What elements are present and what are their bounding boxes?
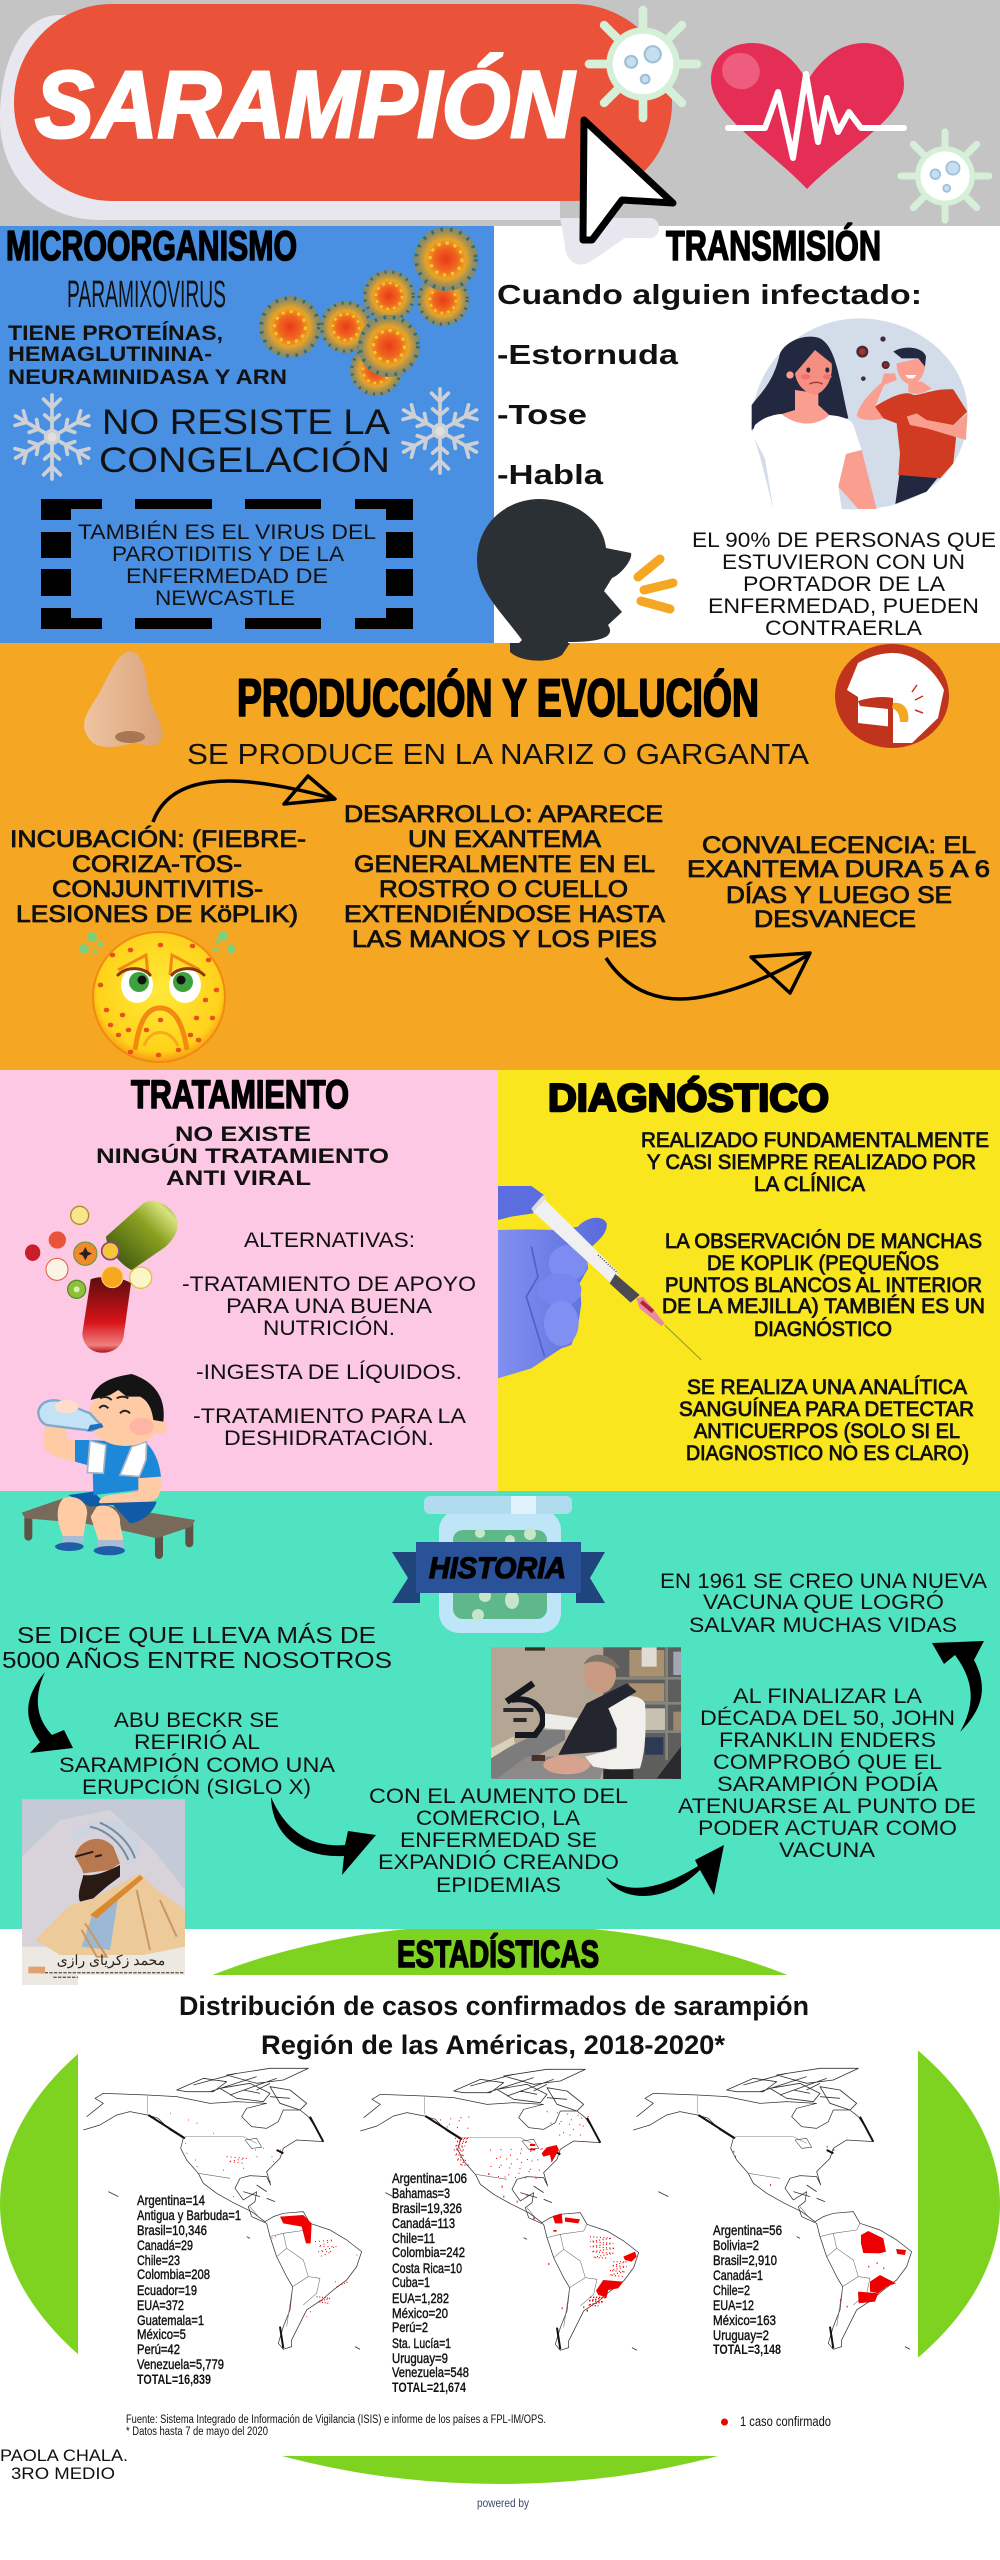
legend: 2018: México=5	[137, 2326, 186, 2342]
author credit	[0, 2446, 128, 2483]
legend: 2018: Colombia=208	[137, 2266, 210, 2282]
text: koplik	[662, 1230, 985, 1341]
banner	[392, 1542, 605, 1603]
text: proteinas: HEMAGLUTININA-	[8, 343, 212, 366]
legend: 2020: Bolivia=2	[713, 2237, 759, 2253]
text: alternativas: -TRATAMIENTO DE APOYO	[182, 1273, 476, 1296]
legend: 2018: TOTAL=16,839	[137, 2371, 211, 2387]
text: koplik: LA OBSERVACIÓN DE MANCHAS	[665, 1230, 982, 1253]
legend: 2019: México=20	[392, 2305, 448, 2321]
panel: estadisticas	[0, 1900, 1000, 2484]
text: abu beckr: ERUPCIÓN (SIGLO X)	[82, 1776, 311, 1799]
arrow: 5000 to abu	[28, 1672, 73, 1753]
legend: 2018: Venezuela=5,779	[137, 2356, 224, 2372]
panel: produccion y evolucion	[0, 643, 1000, 1070]
text: enders: FRANKLIN ENDERS	[719, 1729, 936, 1752]
text: 90 percent: PORTADOR DE LA	[743, 573, 945, 596]
dashed frame	[41, 499, 413, 629]
legend: 2018: EUA=372	[137, 2297, 184, 2313]
text: analitica	[679, 1376, 974, 1465]
text: alternativas: ALTERNATIVAS:	[244, 1229, 415, 1252]
legend: 2019: Canadá=113	[392, 2215, 455, 2231]
icon: virus small	[901, 132, 989, 220]
heading: TRANSMISIÓN	[666, 221, 881, 269]
legend: 2020: Canadá=1	[713, 2267, 763, 2283]
text: proteinas: TIENE PROTEÍNAS,	[8, 322, 223, 345]
text: 1961	[660, 1570, 987, 1637]
text: 90 percent: ENFERMEDAD, PUEDEN	[708, 595, 979, 618]
text: newcastle: ENFERMEDAD DE	[126, 565, 328, 588]
text: koplik: PUNTOS BLANCOS AL INTERIOR	[665, 1274, 982, 1297]
legend: 2020: México=163	[713, 2312, 776, 2328]
text: enders: VACUNA	[779, 1839, 875, 1862]
chart title: Distribución de casos confirmados de sarampión	[179, 1991, 809, 2021]
text: comercio	[369, 1785, 628, 1897]
text: clinica: REALIZADO FUNDAMENTALMENTE	[641, 1129, 989, 1152]
text: convalecencia: DESVANECE	[754, 906, 916, 933]
icon: nose	[84, 652, 162, 747]
text: convalecencia: CONVALECENCIA: EL	[702, 832, 976, 859]
text: incubacion: CORIZA-TOS-	[72, 851, 242, 878]
icon: nostril	[115, 731, 145, 743]
map: 2020	[633, 2068, 912, 2349]
text: 5000 anos: SE DICE QUE LLEVA MÁS DE	[17, 1622, 376, 1648]
text: enders: COMPROBÓ QUE EL	[713, 1751, 942, 1774]
text: incubacion: LESIONES DE KöPLIK)	[16, 901, 298, 928]
icon: snowflake right	[399, 389, 481, 473]
legend: 2018: Brasil=10,346	[137, 2222, 207, 2238]
legend: 2019: EUA=1,282	[392, 2290, 449, 2306]
legend: 2020: Brasil=2,910	[713, 2252, 777, 2268]
panel: microorganismo	[0, 222, 494, 644]
text: no existe: NO EXISTE	[175, 1123, 311, 1146]
source note: Fuente: Sistema Integrado de Información de Vigilancia (ISIS) e informe de los países a FPL-IM/OPS.	[126, 2414, 546, 2426]
icon: virus large	[589, 10, 697, 118]
chart title	[179, 1991, 809, 2060]
photo: scientist at microscope	[491, 1647, 681, 1779]
text: newcastle: TAMBIÉN ES EL VIRUS DEL	[78, 521, 376, 544]
text: abu beckr: SARAMPIÓN COMO UNA	[59, 1754, 335, 1777]
heading: ESTADÍSTICAS	[397, 1932, 599, 1976]
legend: 2020: TOTAL=3,148	[713, 2341, 781, 2357]
text: clinica: LA CLÍNICA	[754, 1173, 865, 1196]
legend: 2018: Canadá=29	[137, 2237, 193, 2253]
text: comercio: COMERCIO, LA	[416, 1807, 580, 1830]
heading: MICROORGANISMO	[6, 222, 297, 269]
text: 90 percent: CONTRAERLA	[765, 617, 922, 640]
arrow: comercio to enders	[606, 1845, 724, 1896]
legend: 2019: Argentina=106	[392, 2170, 467, 2186]
text: enders: AL FINALIZAR LA	[733, 1685, 922, 1708]
panel: header	[0, 0, 1000, 265]
text: congelacion: CONGELACIÓN	[99, 441, 390, 480]
illustration: people coughing	[752, 318, 968, 509]
text: koplik: DE LA MEJILLA) TAMBIÉN ES UN	[662, 1295, 985, 1318]
text: desarrollo: EXTENDIÉNDOSE HASTA	[344, 901, 665, 928]
text: enders: SARAMPIÓN PODÍA	[717, 1773, 938, 1796]
text: alternativas: -TRATAMIENTO PARA LA	[193, 1405, 466, 1428]
photo: abu beckr portrait	[22, 1799, 185, 1985]
legend: 2020: Chile=2	[713, 2282, 750, 2298]
legend: 2019: Bahamas=3	[392, 2185, 450, 2201]
arrow: desarrollo to convalecencia	[606, 953, 810, 999]
panel: tratamiento	[0, 1070, 498, 1491]
icon: heart with pulse	[711, 43, 904, 189]
text: analitica: SE REALIZA UNA ANALÍTICA	[687, 1376, 967, 1399]
text: 90 percent	[692, 529, 996, 640]
text: analitica: ANTICUERPOS (SOLO SI EL	[694, 1420, 960, 1443]
text: alternativas: DESHIDRATACIÓN.	[224, 1427, 434, 1450]
legend: 2019	[392, 2170, 469, 2395]
legend: 2019: Uruguay=9	[392, 2350, 448, 2366]
powered by: powered by	[477, 2496, 529, 2510]
text: analitica: SANGUÍNEA PARA DETECTAR	[679, 1398, 974, 1421]
legend: 2018: Antigua y Barbuda=1	[137, 2207, 241, 2223]
text: convalecencia: EXANTEMA DURA 5 A 6	[687, 856, 990, 883]
green ellipse	[0, 1924, 1000, 2484]
text: comercio: CON EL AUMENTO DEL	[369, 1785, 628, 1808]
legend: 2019: Venezuela=548	[392, 2364, 469, 2380]
text: list: -Habla	[497, 459, 604, 490]
legend: 2018: Perú=42	[137, 2341, 180, 2357]
white map area	[78, 1975, 918, 2456]
text: desarrollo: DESARROLLO: APARECE	[344, 801, 663, 828]
subheading: SE PRODUCE EN LA NARIZ O GARGANTA	[187, 739, 810, 771]
text: no existe: NINGÚN TRATAMIENTO	[96, 1144, 389, 1168]
text: desarrollo: ROSTRO O CUELLO	[379, 876, 628, 903]
legend: 2019: Perú=2	[392, 2319, 428, 2335]
pill shadow	[0, 15, 659, 265]
text: enders: PODER ACTUAR COMO	[698, 1817, 957, 1840]
text: enders: DÉCADA DEL 50, JOHN	[700, 1707, 955, 1730]
author credit: PAOLA CHALA.	[0, 2446, 128, 2465]
virus cluster	[259, 227, 478, 396]
text: koplik: DIAGNÓSTICO	[754, 1318, 892, 1341]
text: koplik: DE KOPLIK (PEQUEÑOS	[707, 1251, 939, 1275]
text: comercio: EXPANDIÓ CREANDO	[378, 1851, 619, 1874]
text: proteinas: NEURAMINIDASA Y ARN	[8, 366, 287, 389]
text: desarrollo: UN EXANTEMA	[408, 826, 601, 853]
text: incubacion	[10, 826, 306, 928]
heading: PRODUCCIÓN Y EVOLUCIÓN	[237, 668, 759, 728]
author credit: 3RO MEDIO	[11, 2464, 115, 2483]
text: alternativas	[182, 1229, 476, 1450]
text: desarrollo: LAS MANOS Y LOS PIES	[352, 926, 657, 953]
heading: TRATAMIENTO	[131, 1073, 349, 1117]
text: enders	[678, 1685, 976, 1862]
legend: 2018: Guatemala=1	[137, 2312, 204, 2328]
chart title: Región de las Américas, 2018-2020*	[261, 2030, 725, 2060]
text: 1961: EN 1961 SE CREO UNA NUEVA	[660, 1570, 987, 1593]
title pill	[14, 4, 672, 201]
text: abu beckr: REFIRIÓ AL	[134, 1731, 260, 1754]
text: 1961: VACUNA QUE LOGRÓ	[703, 1591, 944, 1614]
subheading: PARAMIXOVIRUS	[67, 274, 226, 316]
icon: snowflake left	[11, 395, 93, 479]
legend: 2019: Brasil=19,326	[392, 2200, 462, 2216]
text: abu beckr	[59, 1709, 335, 1799]
icon: throat	[835, 644, 949, 748]
text: 5000 anos	[2, 1622, 392, 1673]
panel: transmision	[477, 221, 996, 660]
map key: 1 caso confirmado	[740, 2414, 831, 2429]
legend: 2020: Uruguay=2	[713, 2327, 769, 2343]
legend: 2019: Colombia=242	[392, 2244, 465, 2260]
text: comercio: EPIDEMIAS	[436, 1874, 561, 1897]
text: alternativas: PARA UNA BUENA	[226, 1295, 432, 1318]
head bottom overlap	[510, 643, 570, 661]
text: 5000 anos: 5000 AÑOS ENTRE NOSOTROS	[2, 1647, 392, 1673]
legend: 2019: TOTAL=21,674	[392, 2379, 466, 2395]
arrow: enders to 1961	[932, 1641, 984, 1732]
text: list: -Tose	[497, 399, 587, 430]
title: SARAMPIÓN	[35, 52, 576, 158]
text: convalecencia: DÍAS Y LUEGO SE	[726, 882, 952, 909]
banner: HISTORIA	[429, 1552, 566, 1585]
heading: DIAGNÓSTICO	[548, 1076, 829, 1120]
text: desarrollo	[344, 801, 665, 953]
text: list: -Estornuda	[497, 339, 679, 370]
legend: 2019: Sta. Lucía=1	[392, 2335, 451, 2351]
legend: 2018: Chile=23	[137, 2252, 180, 2268]
text: abu beckr: ABU BECKR SE	[114, 1709, 279, 1732]
legend: 2018	[137, 2192, 241, 2387]
icon: boy drinking water	[22, 1374, 195, 1555]
text: congelacion: NO RESISTE LA	[102, 403, 391, 442]
text: convalecencia	[687, 832, 990, 933]
portrait caption: محمد زکریای رازی	[57, 1952, 165, 1969]
icon: speaking head	[477, 499, 673, 660]
text: 1961: SALVAR MUCHAS VIDAS	[689, 1614, 957, 1637]
source note	[126, 2414, 546, 2438]
legend: 2020	[713, 2222, 782, 2357]
panel: historia	[0, 1491, 1000, 1929]
icon: flask	[424, 1496, 572, 1633]
source note: * Datos hasta 7 de mayo del 2020	[126, 2426, 268, 2438]
legend: 2019: Costa Rica=10	[392, 2260, 462, 2276]
text: congelacion	[99, 403, 391, 480]
text: proteinas	[8, 322, 287, 389]
icon: cursor	[583, 120, 673, 240]
text: list: Cuando alguien infectado:	[497, 279, 922, 310]
legend: 2019: Cuba=1	[392, 2274, 430, 2290]
text: clinica	[641, 1129, 989, 1196]
legend: 2019: Chile=11	[392, 2230, 435, 2246]
text: newcastle: PAROTIDITIS Y DE LA	[112, 543, 344, 566]
legend: 2018: Argentina=14	[137, 2192, 205, 2208]
text: enders: ATENUARSE AL PUNTO DE	[678, 1795, 976, 1818]
text: 90 percent: ESTUVIERON CON UN	[722, 551, 965, 574]
text: no existe	[96, 1123, 389, 1190]
arrow: abu to comercio	[271, 1797, 376, 1875]
legend: 2020: Argentina=56	[713, 2222, 782, 2238]
text: analitica: DIAGNOSTICO NO ES CLARO)	[686, 1442, 969, 1465]
text: incubacion: INCUBACIÓN: (FIEBRE-	[10, 826, 306, 853]
text: clinica: Y CASI SIEMPRE REALIZADO POR	[647, 1151, 976, 1174]
text: list	[497, 279, 922, 490]
text: newcastle: NEWCASTLE	[155, 587, 295, 610]
text: alternativas: NUTRICIÓN.	[263, 1317, 395, 1340]
illustration: gloved hand with syringe	[498, 1186, 701, 1378]
legend: 2020: EUA=12	[713, 2297, 754, 2313]
teal cap	[186, 1900, 826, 1929]
legend: 2018: Ecuador=19	[137, 2282, 197, 2298]
text: desarrollo: GENERALMENTE EN EL	[354, 851, 655, 878]
map: 2018	[83, 2068, 362, 2349]
text: 90 percent: EL 90% DE PERSONAS QUE	[692, 529, 996, 552]
icon: sick face	[79, 931, 235, 1062]
map: 2019	[360, 2069, 639, 2350]
text: comercio: ENFERMEDAD SE	[400, 1829, 597, 1852]
icon: capsule with fruit	[25, 1201, 178, 1353]
panel: diagnostico	[498, 1070, 1000, 1491]
arrow: incubacion to desarrollo	[153, 776, 335, 822]
text: newcastle	[78, 521, 376, 610]
text: incubacion: CONJUNTIVITIS-	[52, 876, 263, 903]
text: no existe: ANTI VIRAL	[166, 1167, 311, 1190]
text: alternativas: -INGESTA DE LÍQUIDOS.	[196, 1361, 462, 1384]
